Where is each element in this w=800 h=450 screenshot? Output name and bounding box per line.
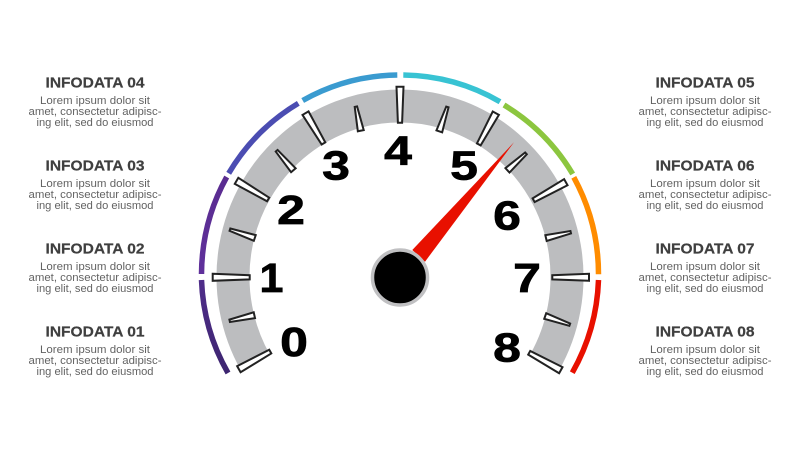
needle	[412, 142, 514, 262]
text block: infodata 07: INFODATA 07	[656, 240, 754, 258]
gauge numbers: 8	[493, 325, 521, 370]
gauge numbers	[260, 128, 541, 370]
text block: infodata 06: amet, consectetur adipisc-	[638, 189, 772, 201]
text block: infodata 03: ing elit, sed do eiusmod	[36, 200, 154, 212]
arc segment 03	[229, 103, 298, 173]
text block: infodata 05: INFODATA 05	[656, 74, 754, 92]
text block: infodata 05: Lorem ipsum dolor sit	[650, 95, 760, 107]
text block: infodata 08: ing elit, sed do eiusmod	[646, 366, 764, 378]
arc segment 01	[202, 280, 228, 373]
gauge numbers: 2	[277, 187, 305, 233]
text block: infodata 08: amet, consectetur adipisc-	[638, 355, 772, 367]
text block: infodata 01: amet, consectetur adipisc-	[28, 355, 162, 367]
text block: infodata 04: ing elit, sed do eiusmod	[36, 117, 154, 129]
text block: infodata 07: amet, consectetur adipisc-	[638, 272, 772, 284]
gauge numbers: 5	[450, 143, 478, 188]
arc segment 02	[202, 177, 227, 274]
gauge numbers: 7	[513, 255, 541, 301]
text block: infodata 01: ing elit, sed do eiusmod	[36, 366, 154, 378]
text block: infodata 07: Lorem ipsum dolor sit	[650, 261, 760, 273]
gauge numbers: 6	[493, 193, 521, 238]
text block: infodata 05: amet, consectetur adipisc-	[638, 106, 772, 118]
text block: infodata 04: INFODATA 04	[46, 74, 145, 92]
text block: infodata 04	[28, 74, 162, 129]
text block: infodata 01: Lorem ipsum dolor sit	[40, 344, 150, 356]
text block: infodata 05	[638, 74, 772, 129]
text block: infodata 08: INFODATA 08	[656, 324, 754, 340]
arc segment 05	[403, 75, 500, 102]
text block: infodata 03	[28, 158, 162, 212]
text block: infodata 06: Lorem ipsum dolor sit	[650, 178, 760, 190]
text block: infodata 02: INFODATA 02	[46, 240, 144, 258]
text block: infodata 05: ing elit, sed do eiusmod	[646, 117, 764, 129]
text block: infodata 04: Lorem ipsum dolor sit	[40, 95, 150, 107]
needle hub	[372, 250, 428, 305]
text block: infodata 02: ing elit, sed do eiusmod	[36, 283, 154, 295]
gauge numbers: 3	[322, 143, 350, 188]
text block: infodata 08	[638, 324, 772, 378]
text block: infodata 03: Lorem ipsum dolor sit	[40, 178, 150, 190]
arc segment 06	[504, 105, 573, 174]
text block: infodata 06: ing elit, sed do eiusmod	[646, 200, 764, 212]
arc segment 04	[303, 75, 397, 100]
text block: infodata 06: INFODATA 06	[656, 158, 754, 174]
gauge numbers: 1	[260, 255, 283, 301]
arc segment 07	[574, 177, 598, 274]
text block: infodata 02: Lorem ipsum dolor sit	[40, 261, 150, 273]
text block: infodata 08: Lorem ipsum dolor sit	[650, 344, 760, 356]
gauge band	[233, 106, 567, 362]
text block: infodata 07: ing elit, sed do eiusmod	[646, 283, 764, 295]
major ticks	[213, 87, 589, 373]
text block: infodata 03: INFODATA 03	[46, 158, 144, 174]
text block: infodata 06	[638, 158, 772, 212]
text block: infodata 04: amet, consectetur adipisc-	[28, 106, 162, 118]
outer coloured arc	[202, 75, 598, 373]
text block: infodata 02: amet, consectetur adipisc-	[28, 272, 162, 284]
text block: infodata 02	[28, 240, 162, 295]
gauge numbers: 4	[384, 128, 413, 173]
gauge numbers: 0	[280, 319, 308, 365]
text block: infodata 01	[28, 324, 162, 378]
text block: infodata 03: amet, consectetur adipisc-	[28, 189, 162, 201]
minor ticks	[229, 106, 571, 327]
text block: infodata 07	[638, 240, 772, 295]
arc segment 08	[572, 280, 598, 373]
text block: infodata 01: INFODATA 01	[46, 324, 144, 340]
